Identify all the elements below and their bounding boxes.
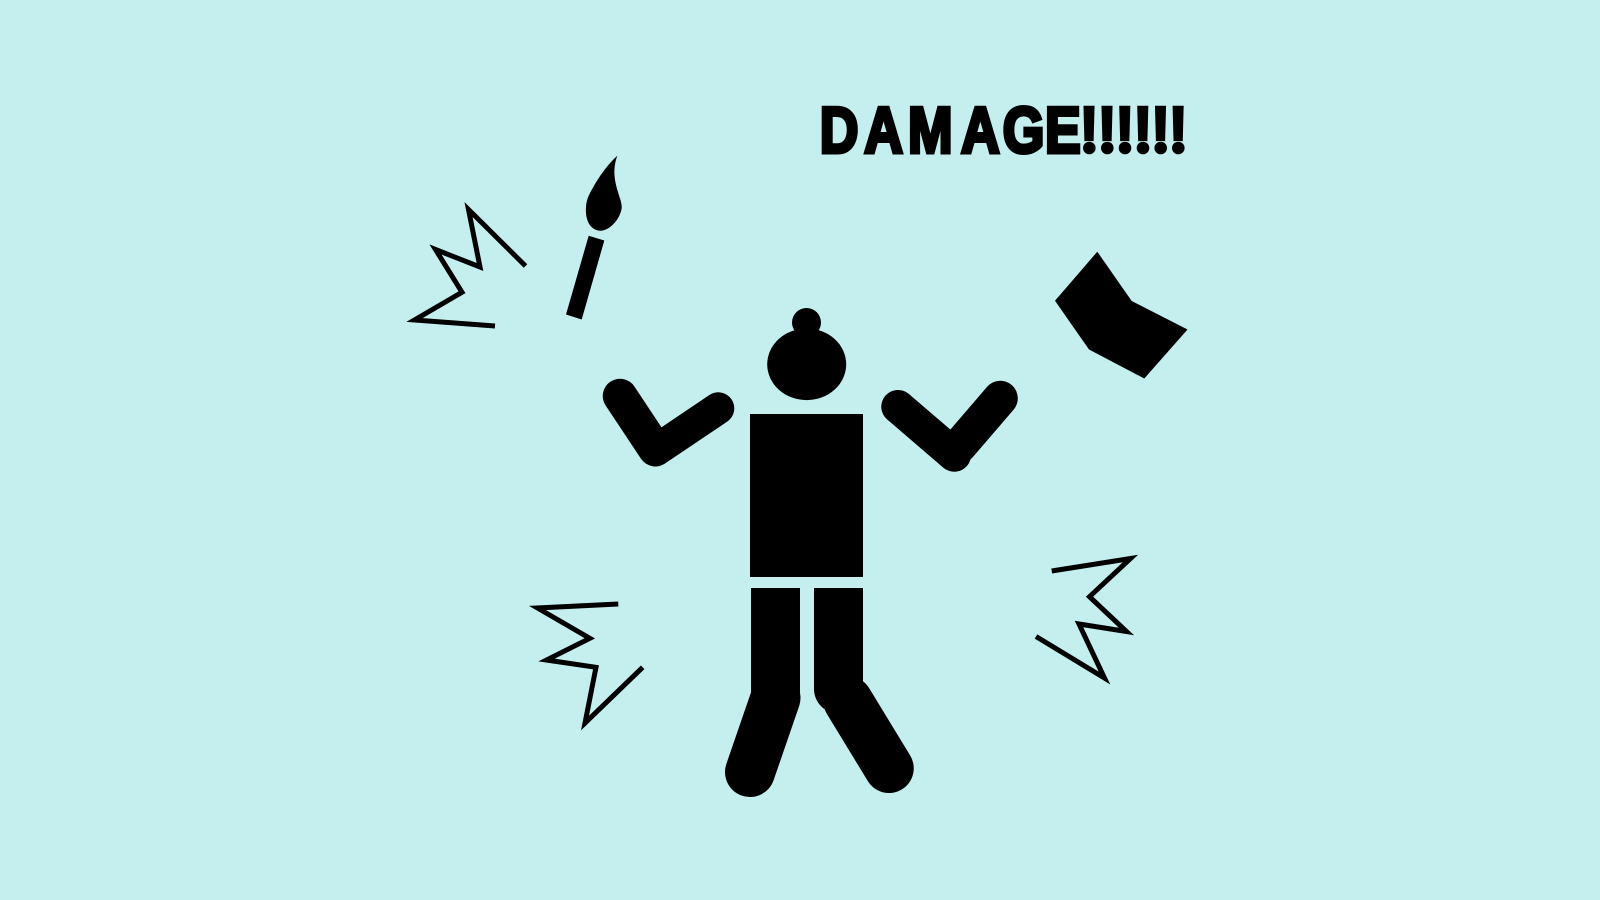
icon: open book xyxy=(1055,252,1188,378)
brush tip xyxy=(586,156,622,231)
brush handle xyxy=(566,236,604,320)
torso xyxy=(750,414,863,577)
hair bun xyxy=(792,308,821,337)
title: DAMAGE: DAMAGE!!!!!! xyxy=(820,94,1187,167)
head xyxy=(767,328,846,400)
burst: lower right xyxy=(1036,558,1130,678)
figure: person xyxy=(620,308,1000,772)
left leg xyxy=(750,588,800,772)
right leg xyxy=(814,588,889,768)
burst: upper left xyxy=(414,210,526,326)
right arm xyxy=(898,398,1000,455)
burst: lower left xyxy=(538,604,643,723)
icon: paintbrush xyxy=(566,156,622,320)
left arm xyxy=(620,396,718,450)
